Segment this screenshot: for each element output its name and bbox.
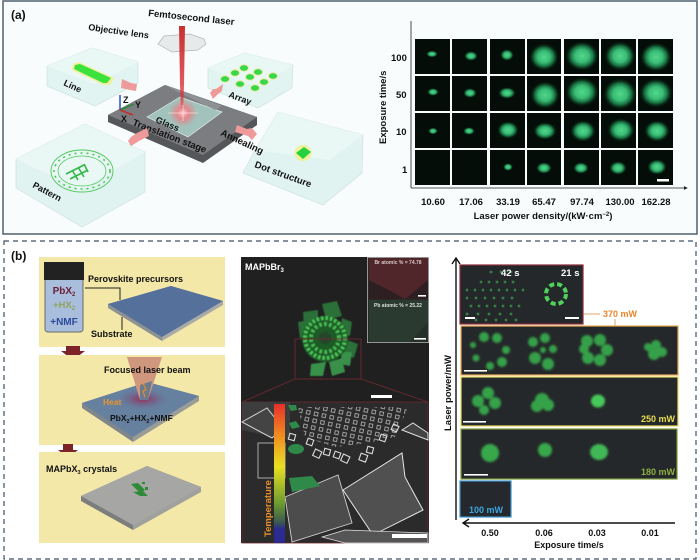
x axis labels: Laser power density/(kW·cm bbox=[474, 211, 602, 222]
green highlighted crystals bbox=[288, 405, 320, 492]
chart: laser power vs exposure time bbox=[443, 258, 678, 550]
x axis labels: 17.06 bbox=[459, 197, 483, 208]
label: 370 mW: 370 mW bbox=[603, 309, 638, 319]
green emission spots bbox=[426, 41, 673, 175]
femtosecond laser beam bbox=[148, 8, 235, 127]
box: line structure: Line bbox=[62, 78, 83, 95]
vial bbox=[44, 262, 84, 332]
vial: PbX bbox=[53, 286, 72, 297]
femtosecond laser beam: Femtosecond laser bbox=[148, 8, 235, 28]
vial: 2 bbox=[72, 292, 76, 298]
micrograph: MAPbBr3: MAPbBr bbox=[245, 262, 280, 272]
x axis labels: 10.60 bbox=[421, 197, 445, 208]
step 2: focused laser: 2 bbox=[127, 419, 130, 425]
translation stage with glass bbox=[108, 85, 257, 163]
larger hollow crystals along arc bbox=[288, 424, 399, 463]
arrow down 1 bbox=[61, 346, 85, 360]
pink arrows bbox=[121, 79, 257, 146]
y axis labels: 100 bbox=[391, 53, 407, 64]
image row: 180 mW bbox=[461, 429, 677, 479]
image row: 250 mW: 250 mW bbox=[641, 414, 676, 424]
step 3: crystals: crystals bbox=[81, 464, 117, 474]
SEM image bbox=[242, 402, 428, 543]
y axis labels: 50 bbox=[396, 90, 407, 101]
step 3: crystals bbox=[39, 452, 225, 543]
x axis labels: 162.28 bbox=[641, 197, 671, 208]
x axis labels bbox=[421, 197, 671, 222]
XYZ axes: Y bbox=[135, 100, 141, 110]
step 3: crystals: MAPbX bbox=[46, 464, 78, 474]
zoom box and guide lines bbox=[242, 339, 428, 402]
step 3: crystals: 3 bbox=[78, 470, 81, 476]
panel (a): fabrication schematic and exposure grid bbox=[3, 1, 697, 234]
box: dot structure bbox=[243, 112, 363, 205]
text: translation stage: Translation stage bbox=[131, 118, 208, 156]
inset: elemental maps bbox=[367, 257, 429, 343]
step 2: focused laser: Heat bbox=[103, 397, 122, 407]
image row: 370 mW bbox=[461, 326, 678, 375]
scale bar bbox=[657, 179, 669, 182]
XYZ axes: X bbox=[121, 114, 127, 124]
image row: 42 s and 21 s bbox=[460, 265, 583, 324]
objective lens: Objective lens bbox=[88, 22, 150, 40]
y axis labels: 1 bbox=[402, 165, 408, 176]
box: dot structure: Dot structure bbox=[253, 159, 313, 190]
y axis labels: Exposure time/s bbox=[378, 71, 389, 144]
inset: elemental maps: Br atomic % = 74.78 bbox=[374, 260, 422, 266]
step 2: focused laser: +NMF bbox=[149, 413, 173, 423]
x axis labels bbox=[481, 528, 659, 550]
image row: 42 s and 21 s: 21 s bbox=[561, 268, 580, 279]
objective lens bbox=[88, 22, 206, 52]
arrow down 2 bbox=[58, 444, 78, 458]
x axis labels: 65.47 bbox=[532, 197, 556, 208]
box: pattern structure: Pattern bbox=[31, 180, 63, 203]
image row: 100 mW: 100 mW bbox=[469, 505, 504, 515]
x axis labels: 0.06 bbox=[535, 528, 553, 538]
label: 370 mW bbox=[584, 309, 638, 326]
axes bbox=[411, 21, 687, 188]
temperature colour bar bbox=[263, 404, 285, 543]
image row: 250 mW bbox=[461, 377, 678, 426]
vial: +NMF bbox=[50, 317, 78, 328]
image row: 42 s and 21 s: 42 s bbox=[501, 268, 520, 279]
step 2: focused laser: 2 bbox=[146, 419, 149, 425]
step 1: precursors bbox=[39, 257, 225, 347]
y axis labels: 10 bbox=[396, 127, 407, 138]
step 2: focused laser: PbX bbox=[110, 413, 127, 423]
image row: 180 mW: 180 mW bbox=[641, 467, 676, 477]
inset: elemental maps: Pb atomic % = 25.22 bbox=[374, 303, 422, 309]
heading (a): (a) bbox=[11, 8, 26, 22]
x axis labels: 0.03 bbox=[588, 528, 606, 538]
XYZ axes bbox=[120, 95, 141, 124]
temperature colour bar: Temperature bbox=[263, 480, 274, 537]
x axis labels: 33.19 bbox=[496, 197, 520, 208]
x axis labels: 130.00 bbox=[605, 197, 635, 208]
box: array structure bbox=[208, 53, 293, 108]
vial: 2 bbox=[72, 306, 76, 312]
step 1: precursors: Substrate bbox=[91, 329, 133, 339]
x axis labels: 0.50 bbox=[481, 528, 499, 538]
x axis labels: ) bbox=[609, 211, 612, 222]
box: array structure: Array bbox=[227, 89, 253, 107]
x axis labels: 0.01 bbox=[641, 528, 659, 538]
image row: 100 mW bbox=[460, 481, 511, 517]
text: glass: Glass bbox=[154, 115, 181, 133]
axes bbox=[452, 258, 675, 527]
x axis labels: 97.74 bbox=[570, 197, 595, 208]
image cells bbox=[415, 39, 673, 185]
green crystal cluster bbox=[298, 301, 358, 376]
text: annealing: Annealing bbox=[219, 128, 265, 157]
box: pattern structure bbox=[16, 124, 145, 227]
step 2: focused laser bbox=[39, 355, 225, 445]
step 2: focused laser: Focused laser beam bbox=[104, 365, 191, 375]
box: line structure bbox=[47, 48, 138, 106]
step 2: focused laser: +HX bbox=[130, 413, 147, 423]
heading (b): (b) bbox=[11, 249, 26, 263]
micrograph: MAPbBr3 bbox=[241, 257, 429, 543]
XYZ axes: Z bbox=[123, 95, 129, 105]
y axis title: Laser power/mW bbox=[443, 355, 454, 431]
micrograph: MAPbBr3: 3 bbox=[280, 268, 284, 274]
x axis labels: Exposure time/s bbox=[534, 540, 604, 550]
chart: exposure grid bbox=[378, 21, 687, 222]
x axis labels: −2 bbox=[602, 212, 610, 218]
y axis labels bbox=[378, 53, 408, 176]
vial: +HX bbox=[53, 300, 72, 311]
panel (b): laser crystallisation bbox=[4, 241, 696, 559]
step 1: precursors: Perovskite precursors bbox=[88, 274, 183, 284]
